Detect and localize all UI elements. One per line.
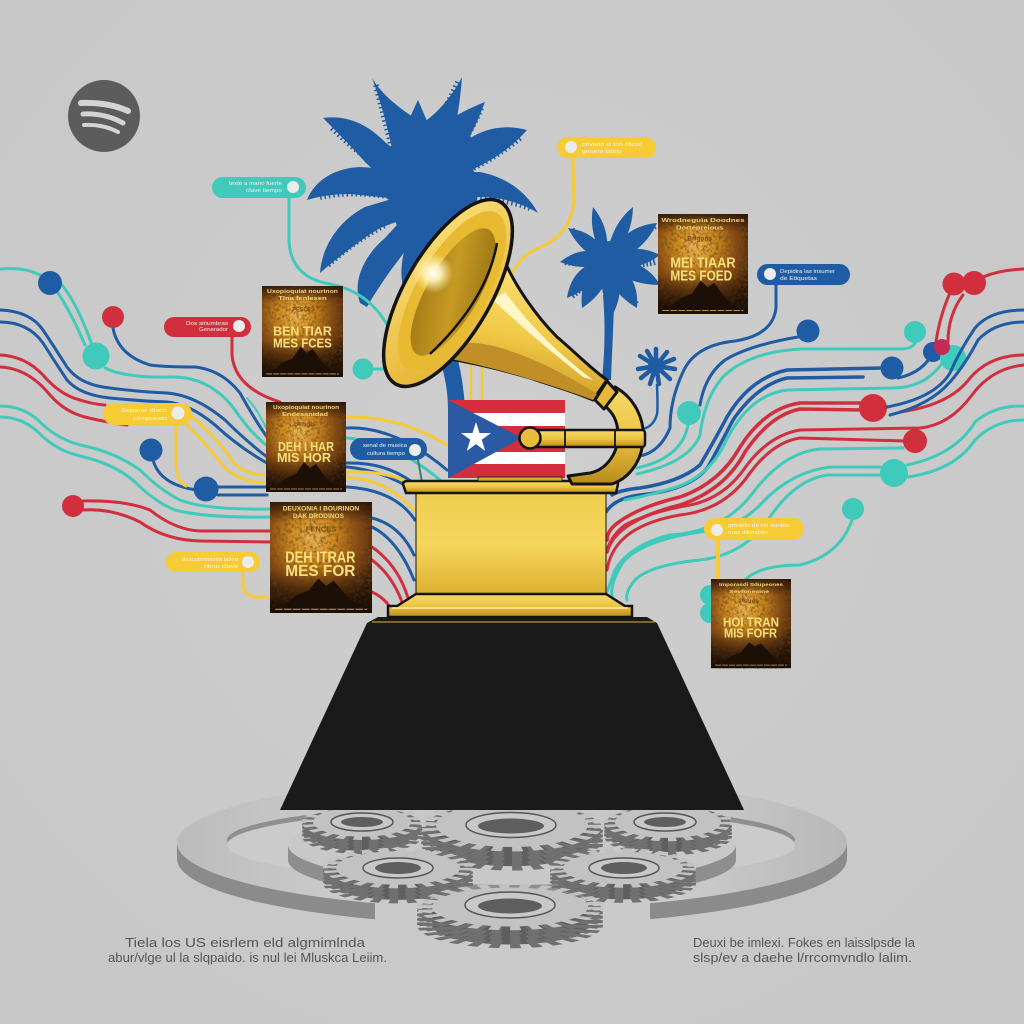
album cover 2: bengis bbox=[294, 422, 317, 428]
album cover 3: MES FOR bbox=[285, 562, 356, 580]
gramophone horn bbox=[358, 181, 645, 484]
golden base bbox=[388, 481, 632, 617]
album cover 1: Tlna fenlesen bbox=[278, 296, 327, 302]
tag: blue center label: senal de musica bbox=[363, 443, 408, 449]
blue wires crossing the red node bbox=[887, 310, 1024, 415]
album cover 4: Brigons bbox=[687, 236, 712, 243]
tag: yellow left label: Separar disco bbox=[121, 408, 167, 414]
tag: teal label bbox=[212, 177, 306, 198]
tag: blue center label: cultura tiempo bbox=[367, 451, 405, 457]
album cover 2: Endesanidad bbox=[282, 412, 328, 418]
album cover 5: Imporasdi Sdupeones bbox=[719, 582, 783, 588]
gear: top left bbox=[313, 807, 411, 851]
album cover 2 bbox=[266, 402, 346, 492]
broken outer ring platform bbox=[177, 799, 847, 920]
album cover 3: FENCES bbox=[306, 525, 336, 534]
album cover 5: Psues bbox=[739, 599, 760, 605]
tag: blue top right label bbox=[757, 264, 850, 285]
horizontal arm bbox=[530, 430, 645, 447]
tag: red label: Dos sinumbras bbox=[186, 321, 228, 327]
tag: yellow right label: mas difundido bbox=[728, 530, 768, 536]
inner disc platform bbox=[288, 805, 736, 900]
connector wires: left side bbox=[0, 197, 447, 610]
album cover 5: HOI TRAN bbox=[723, 615, 779, 630]
connector wires: right side bbox=[513, 158, 1024, 600]
palm trunk and lines behind horn bbox=[440, 360, 482, 410]
caption right: Deuxi be imlexi. Fokes en laisslpsde la bbox=[693, 936, 915, 950]
album cover 4: MES FOED bbox=[670, 269, 732, 285]
caption left bbox=[108, 936, 387, 965]
tag: yellow lower left label bbox=[166, 552, 260, 572]
tag: blue top right label: de Etiquetas bbox=[780, 276, 817, 282]
medium palm silhouette bbox=[560, 207, 660, 380]
album cover 3: DAK DRODINOS bbox=[293, 513, 344, 520]
album cover 5: Sevfonesine bbox=[729, 589, 769, 595]
tag: yellow top label: privado el ton oficial bbox=[582, 142, 642, 148]
album cover 3: DEUXONIA I BOURINON bbox=[283, 506, 360, 513]
tag: blue center label bbox=[350, 438, 427, 460]
gear: bottom center bbox=[432, 888, 588, 944]
album cover 3: DEH ITRAR bbox=[285, 549, 356, 566]
tag: yellow right label: privado de un sonido bbox=[728, 523, 790, 529]
tag: teal label: texto a mano fuerte bbox=[229, 181, 282, 187]
gear: top right bbox=[615, 806, 721, 852]
icon: streaming logo bbox=[68, 80, 140, 152]
album cover 1: Uxopioquiat nourinon bbox=[267, 289, 338, 295]
tag: teal label: clave tiempo bbox=[246, 188, 282, 194]
tag: blue top right label: Depidira las insumer bbox=[780, 269, 835, 275]
tag: red label: Generador bbox=[199, 327, 228, 333]
album cover 2: DEH I HAR bbox=[278, 439, 335, 454]
album cover 4: Dortepreious bbox=[676, 226, 723, 232]
caption right: slsp/ev a daehe l/rrcomvndlo lalim. bbox=[693, 951, 912, 965]
gear: top center bbox=[436, 803, 588, 866]
album cover 2: MIS HOR bbox=[277, 450, 332, 465]
album cover 1: MES FCES bbox=[273, 336, 332, 351]
tag: yellow left label: compuesto bbox=[133, 416, 167, 422]
black pedestal bbox=[280, 617, 744, 810]
tag: yellow top label: genero latino bbox=[582, 149, 622, 155]
album cover 5 bbox=[711, 579, 791, 668]
small palm silhouette bbox=[638, 349, 675, 429]
album cover 1 bbox=[262, 286, 343, 377]
tag: yellow lower left label: ritmo clave bbox=[204, 564, 238, 570]
node dots bbox=[38, 271, 986, 623]
tag: yellow right label bbox=[704, 518, 804, 540]
album cover 4: MEI TIAAR bbox=[670, 255, 736, 271]
caption right bbox=[693, 936, 915, 965]
flag of Puerto Rico bbox=[448, 400, 565, 481]
caption left: Tiela los US eisrlem eld algmimlnda bbox=[125, 936, 365, 950]
album cover 2: Uxopioquiat nourinon bbox=[273, 405, 339, 411]
gear: middle left bbox=[336, 851, 460, 900]
album cover 1: BEN TIAR bbox=[273, 324, 332, 339]
large palm silhouette bbox=[307, 77, 538, 307]
tag: red label bbox=[164, 317, 251, 337]
album cover 5: MIS FOFR bbox=[724, 625, 778, 640]
gear: middle right bbox=[563, 852, 683, 899]
caption left: abur/vlge ul la slqpaido. is nul lei Mluskca Leiim. bbox=[108, 951, 387, 965]
tag: yellow top label bbox=[557, 137, 656, 158]
album cover 1: PESCES bbox=[292, 307, 315, 313]
horn neck tube bbox=[568, 387, 643, 484]
album cover 4: Wrodneguia Doodnes bbox=[661, 218, 745, 224]
tag: yellow lower left label: descubrimiento latino bbox=[182, 557, 238, 563]
album cover 3 bbox=[270, 502, 372, 613]
album cover 4 bbox=[658, 214, 748, 314]
tag: yellow left label bbox=[103, 403, 192, 425]
